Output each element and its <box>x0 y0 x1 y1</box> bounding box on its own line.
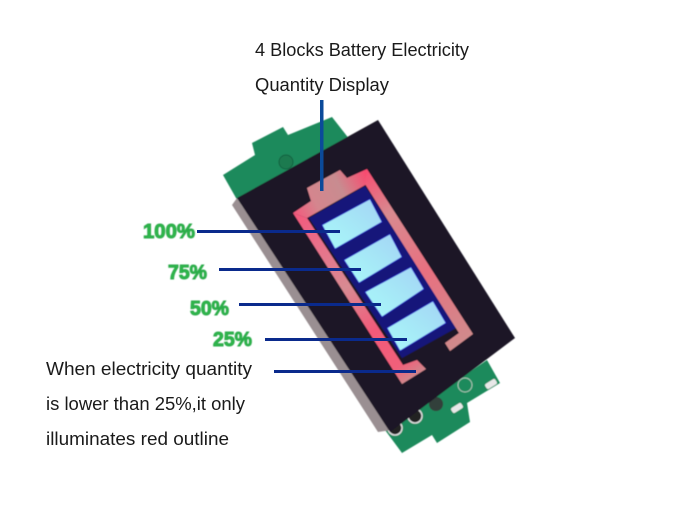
solder pads <box>388 378 498 435</box>
percentage labels: 25% <box>213 329 252 351</box>
battery module photo <box>223 117 515 453</box>
note text: When electricity quantity <box>46 359 252 379</box>
title: 4 Blocks Battery Electricity <box>255 40 469 60</box>
level block 25% <box>387 301 446 351</box>
level block 75% <box>344 234 402 283</box>
pointer to battery terminal <box>320 100 324 191</box>
note text: is lower than 25%,it only <box>46 394 245 414</box>
title <box>255 40 469 95</box>
top green circuit board tab <box>223 117 350 205</box>
red outline right <box>365 169 473 351</box>
battery top band and terminal <box>293 169 367 218</box>
black display body <box>237 120 515 432</box>
percentage labels: 100% <box>143 221 195 243</box>
mounting hole top <box>279 155 293 169</box>
pointer lines <box>197 230 416 373</box>
bottom green circuit board tab <box>385 360 500 453</box>
note text: illuminates red outline <box>46 429 229 449</box>
percentage labels: 75% <box>168 262 207 284</box>
percentage labels: 50% <box>190 298 229 320</box>
percentage labels <box>143 221 252 351</box>
note text <box>46 359 252 449</box>
red outline left and bottom <box>293 213 426 384</box>
grey side of the case <box>232 198 392 432</box>
level block 50% <box>365 267 424 317</box>
battery graphic <box>293 169 473 384</box>
title: Quantity Display <box>255 75 389 95</box>
level block 100% <box>322 199 382 249</box>
navy interior <box>309 186 458 358</box>
